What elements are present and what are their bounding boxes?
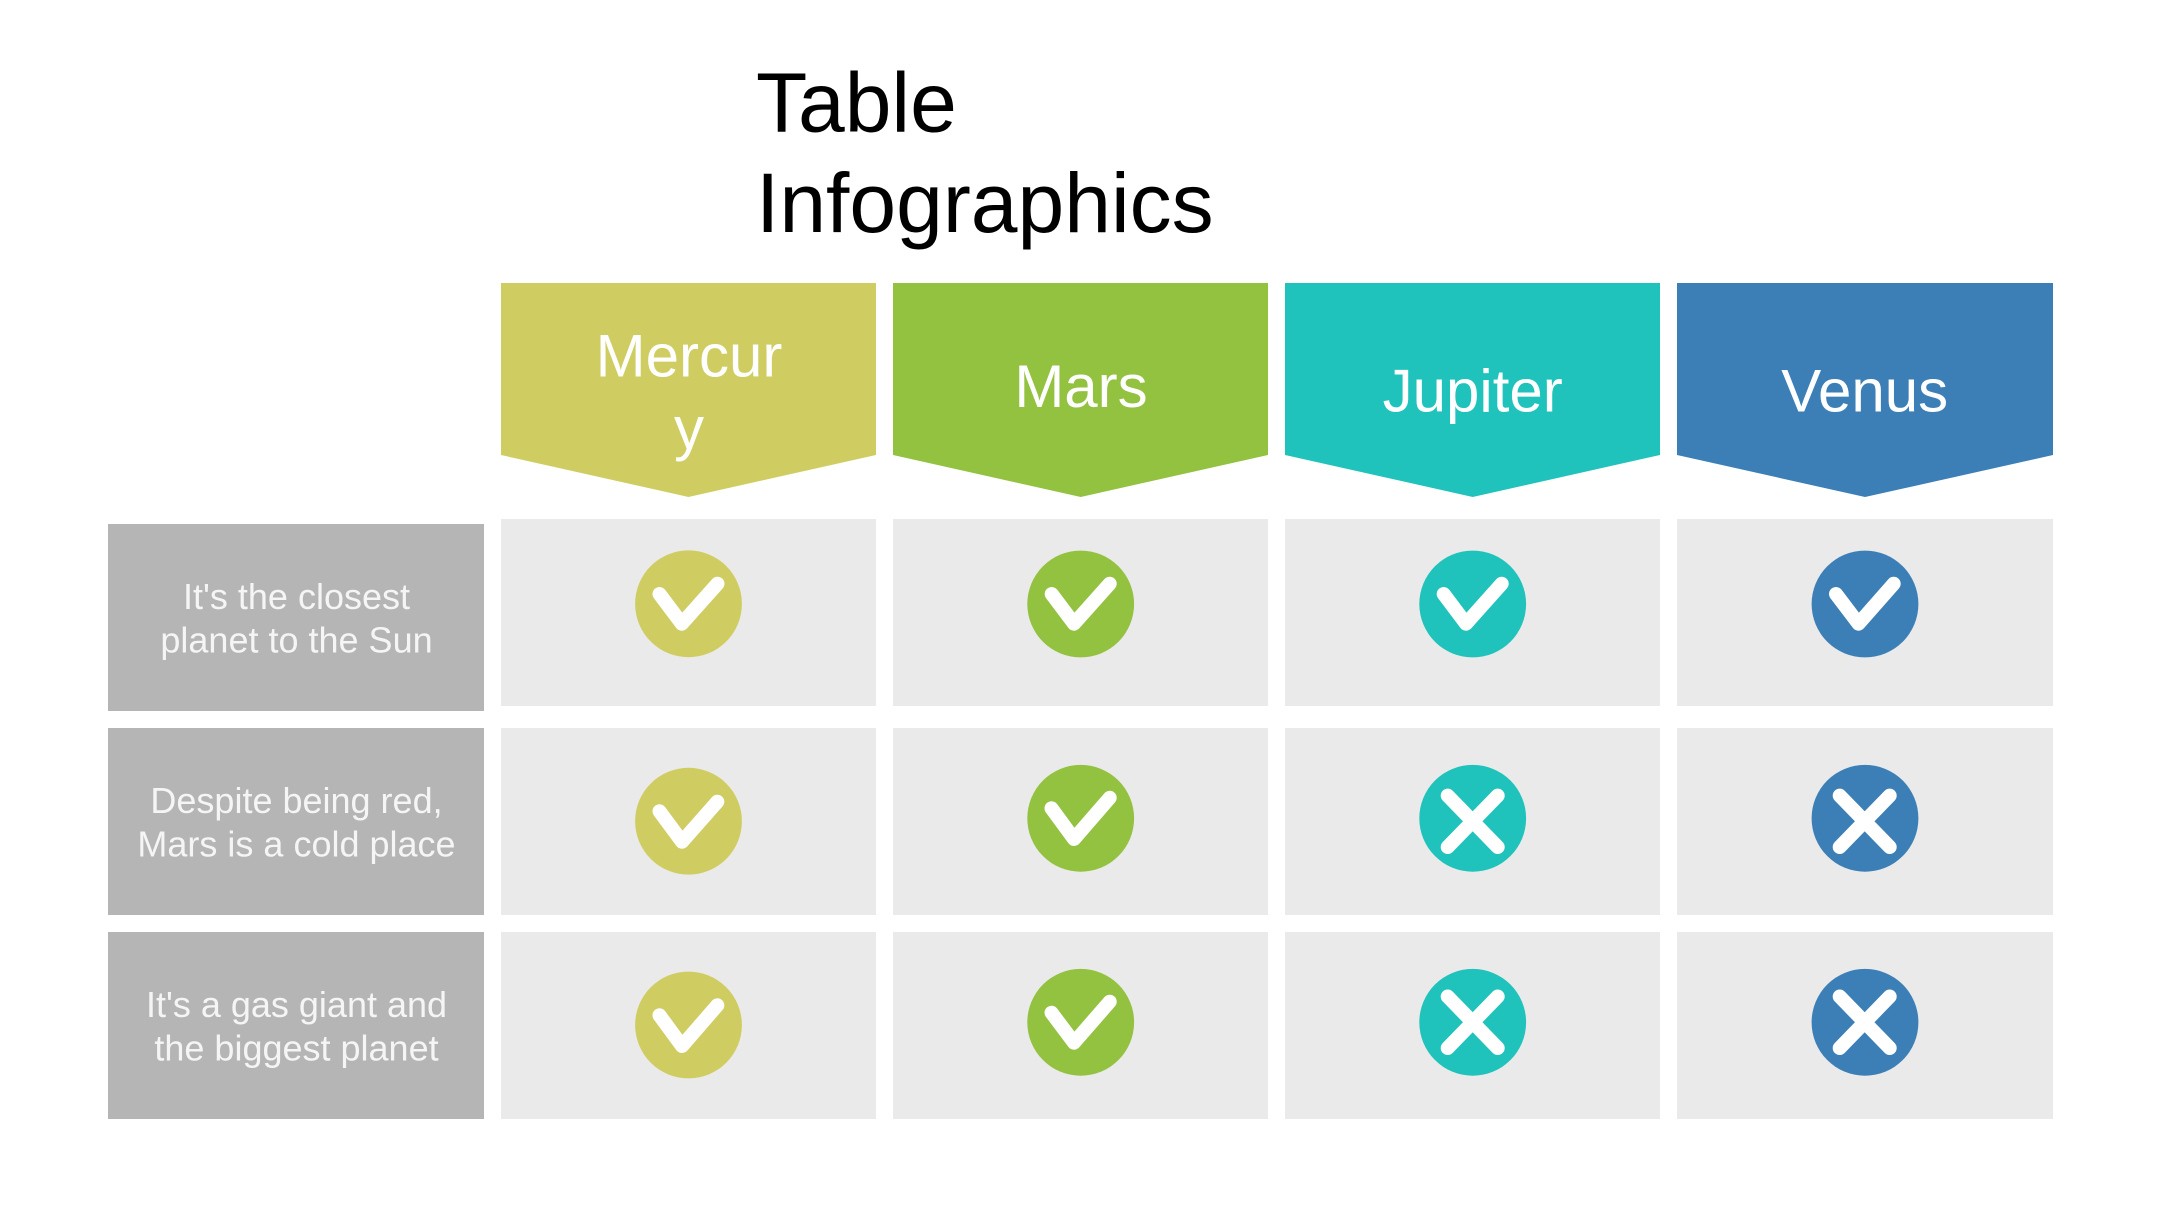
row label 2: Despite being red, (150, 780, 443, 821)
cell: row 3 Mars check (893, 932, 1268, 1119)
title (756, 56, 1214, 250)
cell: row 3 Jupiter cross (1285, 932, 1660, 1119)
cell: row 3 Venus cross (1677, 932, 2053, 1119)
header: Mars (893, 283, 1268, 497)
cell: row 1 Venus check (1677, 519, 2053, 706)
header: Mars: Mars (1014, 353, 1148, 420)
row label 2 (108, 728, 484, 915)
row label 3 (108, 932, 484, 1119)
cell: row 1 Mars check (893, 519, 1268, 706)
title: Table (756, 56, 957, 150)
cell: row 2 Mercury check (501, 728, 876, 915)
row label 1: planet to the Sun (160, 620, 433, 660)
cell: row 2 Mars check (893, 728, 1268, 915)
cell: row 3 Mercury check (501, 932, 876, 1119)
title: Infographics (756, 156, 1214, 250)
header: Jupiter: Jupiter (1383, 358, 1563, 425)
row label 1 (108, 524, 484, 711)
cell: row 1 Jupiter check (1285, 519, 1660, 706)
header: Venus (1677, 283, 2053, 497)
header: Mercury: y (674, 395, 704, 462)
row label 3: It's a gas giant and (146, 984, 447, 1025)
header: Mercury: Mercur (596, 322, 782, 390)
header: Jupiter (1285, 283, 1660, 497)
row label 2: Mars is a cold place (137, 824, 456, 864)
header: Venus: Venus (1781, 358, 1948, 425)
cell: row 1 Mercury check (501, 519, 876, 706)
row label 1: It's the closest (183, 576, 410, 617)
cell: row 2 Venus cross (1677, 728, 2053, 915)
row label 3: the biggest planet (154, 1028, 439, 1068)
header: Mercury (501, 283, 876, 497)
cell: row 2 Jupiter cross (1285, 728, 1660, 915)
